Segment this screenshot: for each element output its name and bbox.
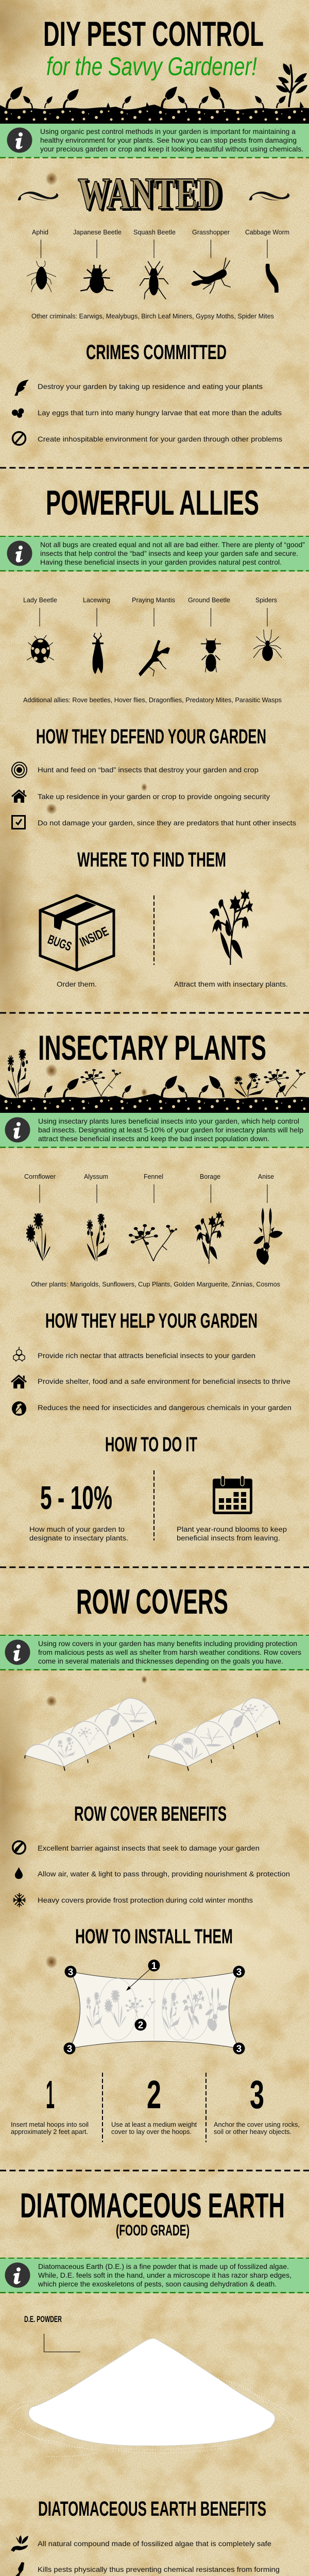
icon: bugs inside box: BUGS — [46, 932, 74, 954]
insect: ground beetle: Ground Beetle — [188, 596, 230, 604]
heading: crimes committed: CRIMES COMMITTED — [86, 341, 227, 364]
panel: row covers info band: Using row covers in your garden has many benefits including providing protection — [38, 1639, 297, 1648]
heading: how to do it: HOW TO DO IT — [105, 1433, 197, 1456]
caption: year-round blooms: beneficial insects from leaving. — [177, 1534, 280, 1542]
icon: target — [12, 762, 27, 778]
list: how they help: Reduces the need for insecticides and dangerous chemicals in your garden — [38, 1403, 291, 1412]
icon: checkbox — [12, 816, 25, 828]
icon: hand with plant — [11, 2535, 28, 2552]
insect: spiders: Spiders — [255, 596, 277, 604]
wanted heading: WANTED — [79, 171, 224, 221]
illustration: row cover tunnel left — [25, 1698, 156, 1771]
badge: step 1: 1 — [151, 1961, 157, 1972]
heading: where to find them: WHERE TO FIND THEM — [77, 849, 226, 871]
plant: borage: Borage — [200, 1173, 220, 1180]
plant: anise: Anise — [258, 1173, 274, 1180]
plant: fennel — [129, 1173, 177, 1261]
icon: snowflake — [13, 1893, 26, 1907]
panel: diatomaceous earth info band: which pierce the exoskeletons of pests, soon causing dehydration & death. — [38, 2280, 277, 2288]
icon: water drop — [15, 1867, 23, 1879]
badge: step 2: 2 — [138, 2020, 143, 2031]
plant: fennel: Fennel — [144, 1173, 163, 1180]
heading: row cover benefits: ROW COVER BENEFITS — [74, 1803, 227, 1825]
step 2: cover to lay over the hoops. — [111, 2128, 192, 2136]
illustration: row cover tunnel right — [148, 1698, 280, 1771]
insect: lacewing — [83, 596, 110, 674]
step 3 — [214, 2073, 300, 2136]
plant: cornflower: Cornflower — [24, 1173, 56, 1180]
badges: step 3 corners: 3 — [236, 2044, 242, 2055]
list: how they defend: Take up residence in your garden or crop to provide ongoing security — [38, 792, 270, 801]
pest: aphid — [27, 228, 56, 292]
caption: how much: How much of your garden to — [29, 1525, 125, 1533]
step 2: Use at least a medium weight — [111, 2121, 197, 2128]
list: crimes — [12, 380, 282, 445]
step 3: soil or other heavy objects. — [214, 2128, 291, 2136]
list: DE benefits: Kills pests physically thus preventing chemical resistances from forming — [38, 2565, 280, 2573]
icon: no chemicals — [12, 1401, 26, 1416]
additional allies text: Additional allies: Rove beetles, Hover flies, Dragonflies, Predatory Mites, Parasitic Wasps — [23, 696, 282, 704]
subheading: food grade: (FOOD GRADE) — [116, 2222, 190, 2239]
panel: row covers info band: come in several materials and thicknesses depending on the goals you have. — [38, 1657, 283, 1665]
list: how they help: Provide shelter, food and a safe environment for beneficial insects to thrive — [38, 1377, 290, 1385]
pest: japanese beetle — [73, 228, 122, 293]
insect: spiders — [253, 596, 282, 661]
other criminals text: Other criminals: Earwigs, Mealybugs, Birch Leaf Miners, Gypsy Moths, Spider Mites — [31, 312, 274, 320]
icon: bugs inside box — [40, 895, 114, 970]
pest: cabbage worm: Cabbage Worm — [245, 228, 289, 236]
pest: aphid: Aphid — [32, 228, 48, 236]
caption: attract them: Attract them with insectary plants. — [174, 980, 288, 988]
list: crimes: Lay eggs that turn into many hungry larvae that eat more than the adults — [38, 409, 282, 417]
panel: beneficial insects — [23, 596, 282, 676]
list: how they defend: Do not damage your garden, since they are predators that hunt other insects — [38, 819, 296, 827]
list: crimes: Destroy your garden by taking up residence and eating your plants — [38, 382, 263, 391]
wanted heading: WANTED — [78, 169, 220, 219]
plant: anise — [253, 1173, 283, 1265]
pest: cabbage worm — [245, 228, 289, 291]
step 3: 3 — [250, 2073, 264, 2117]
caption: order them: Order them. — [57, 980, 97, 988]
garden soil band with sprouts — [0, 63, 309, 124]
badge: step 1 — [148, 1960, 160, 1972]
panel: insectary info band: attract these beneficial insects and keep the bad insect population down. — [38, 1134, 269, 1143]
panel: intro info band: healthy environment for your plants. See how you can stop pests from damaging — [40, 136, 297, 144]
icon: bugs inside box: INSIDE — [78, 924, 111, 950]
panel: diatomaceous earth info band: While, D.E. feels soft in the hand, under a microscope it has razor sharp edges, — [38, 2271, 291, 2279]
panel: allies info band: insects that help control the “bad” insects and keep your garden safe and secure. — [40, 549, 298, 557]
icon: knife — [14, 2562, 24, 2576]
icon: borage plant — [210, 889, 253, 965]
step 1: Insert metal hoops into soil — [11, 2121, 89, 2128]
icon: prohibited sign — [12, 432, 26, 445]
panel: intro info band: Using organic pest control methods in your garden is important for maintaining a — [40, 127, 296, 135]
label: D.E. powder: D.E. POWDER — [24, 2314, 62, 2324]
plant: borage — [195, 1173, 225, 1264]
icon: calendar — [213, 1476, 252, 1514]
icon: house — [11, 789, 27, 803]
icon: no bugs — [12, 1840, 26, 1855]
heading: how to install them: HOW TO INSTALL THEM — [75, 1925, 233, 1948]
insect: praying mantis: Praying Mantis — [132, 596, 175, 604]
insect: lacewing: Lacewing — [83, 596, 110, 604]
pest: squash beetle — [133, 228, 176, 299]
insect: lady beetle — [23, 596, 57, 663]
pest: grasshopper — [192, 228, 231, 294]
panel: wanted pests — [27, 228, 289, 299]
panel: diatomaceous earth info band — [0, 2258, 309, 2293]
step 1: 1 — [46, 2073, 55, 2117]
step 2: 2 — [147, 2073, 161, 2117]
icon: house — [11, 1375, 27, 1388]
caption: how much — [29, 1525, 128, 1542]
panel: row covers info band — [0, 1635, 309, 1670]
icon: honeycomb — [13, 1347, 25, 1362]
panel: allies info band: Having these beneficial insects in your garden provides natural pest control. — [40, 558, 282, 566]
badges: step 3 corners: 3 — [236, 1967, 242, 1978]
list: row cover benefits: Heavy covers provide frost protection during cold winter months — [38, 1896, 253, 1904]
icon: eggs — [12, 408, 24, 418]
step 1 — [11, 2073, 89, 2136]
badge: step 2 — [135, 2019, 146, 2031]
caption: how much: designate to insectary plants. — [29, 1534, 128, 1542]
list: DE benefits: All natural compound made of fossilized algae that is completely safe — [38, 2539, 271, 2548]
plant: cornflower — [24, 1173, 56, 1261]
label: D.E. powder — [24, 2314, 80, 2352]
list: how they help: Provide rich nectar that attracts beneficial insects to your garden — [38, 1351, 255, 1360]
plant: alyssum — [84, 1173, 109, 1261]
list: how they help — [11, 1347, 291, 1416]
insect: praying mantis — [132, 596, 175, 676]
insect: lady beetle: Lady Beetle — [23, 596, 57, 604]
caption: year-round blooms — [177, 1525, 287, 1542]
panel: insectary info band: bad insects. Designating at least 5-10% of your garden for insectary plants will help — [38, 1126, 303, 1134]
divider: how to do it — [153, 1470, 154, 1540]
badges: step 3 corners: 3 — [68, 1967, 73, 1978]
list: row cover benefits — [12, 1840, 290, 1907]
badges: step 3 corners — [64, 1966, 245, 2055]
stat: 5-10 percent: 5 - 10% — [40, 1479, 112, 1516]
dividers: steps — [102, 2073, 206, 2142]
panel: intro info band — [0, 124, 309, 158]
step 3: Anchor the cover using rocks, — [214, 2121, 300, 2128]
list: row cover benefits: Allow air, water & light to pass through, providing nourishment & protection — [38, 1870, 290, 1878]
badges: step 3 corners: 3 — [67, 2044, 72, 2055]
section divider — [0, 2170, 309, 2171]
list: row cover benefits: Excellent barrier against insects that seek to damage your garden — [38, 1844, 260, 1852]
illustration: powder pile — [7, 2338, 299, 2456]
panel: insectary info band: Using insectary plants lures beneficial insects into your garden, which help control — [38, 1117, 299, 1125]
pest: squash beetle: Squash Beetle — [133, 228, 176, 236]
panel: insectary plant types — [24, 1173, 283, 1265]
pest: grasshopper: Grasshopper — [192, 228, 230, 236]
list: DE benefits — [11, 2535, 280, 2576]
caption: year-round blooms: Plant year-round blooms to keep — [177, 1525, 287, 1533]
panel: row covers info band: from malicious pests as well as shelter from harsh weather conditions. Row covers — [38, 1648, 301, 1656]
section divider — [0, 1566, 309, 1568]
list: how they defend — [11, 762, 296, 828]
icon: eaten leaf — [14, 380, 29, 396]
list: how they defend: Hunt and feed on “bad” insects that destroy your garden and crop — [38, 766, 259, 774]
divider: where to find them — [153, 895, 154, 965]
list: crimes: Create inhospitable environment for your garden through other problems — [38, 435, 282, 443]
panel: diatomaceous earth info band: Diatomaceous Earth (D.E.) is a fine powder that is made up of fossilized algae. — [38, 2262, 289, 2270]
section divider — [0, 1012, 309, 1014]
pest: japanese beetle: Japanese Beetle — [73, 228, 122, 236]
insect: ground beetle — [188, 596, 230, 672]
section divider — [0, 467, 309, 469]
plant: alyssum: Alyssum — [84, 1173, 108, 1180]
other plants text: Other plants: Marigolds, Sunflowers, Cup Plants, Golden Marguerite, Zinnias, Cosmos — [31, 1280, 280, 1288]
garden soil band with flowers — [0, 1048, 309, 1113]
panel: allies info band — [0, 536, 309, 571]
panel: insectary info band — [0, 1113, 309, 1148]
illustration: cover installation diagram — [64, 1960, 245, 2055]
panel: allies info band: Not all bugs are created equal and not all are bad either. There are plenty of “good” — [40, 540, 305, 549]
step 1: approximately 2 feet apart. — [11, 2128, 88, 2136]
step 2 — [111, 2073, 197, 2136]
panel: intro info band: your precious garden or crop and keep it looking beautiful without using chemicals. — [40, 145, 303, 153]
